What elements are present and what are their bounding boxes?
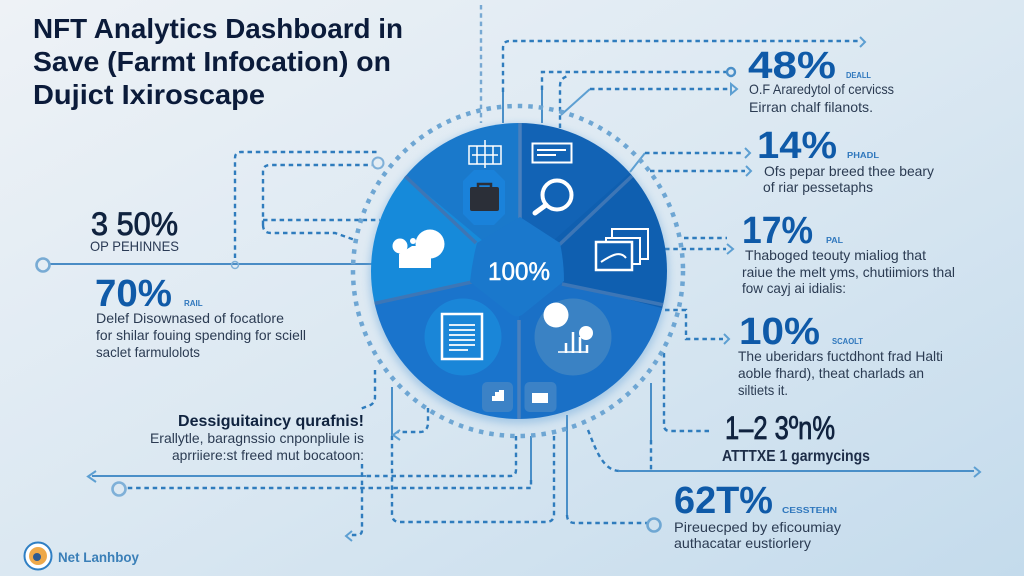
stat: 1-2 3% xyxy=(722,410,870,465)
icon: ornate emblem xyxy=(469,140,501,168)
stat: 17% xyxy=(742,210,955,296)
segment: top right xyxy=(520,123,632,240)
title: NFT Analytics Dashboard in xyxy=(33,13,403,44)
icon: small tile left xyxy=(482,382,513,412)
icon: briefcase xyxy=(463,170,505,225)
stat: 48%: 48% xyxy=(748,45,836,87)
text block: lower left: aprriiere:st freed mut bocatoon: xyxy=(172,447,364,463)
icon: picture frames xyxy=(596,229,648,270)
stat: 17%: 17% xyxy=(742,210,813,252)
stat: 10%: SCAOLT xyxy=(832,337,863,346)
donut chart xyxy=(366,120,672,428)
stat: 1-2 3%: ATTTXE 1 garmycings xyxy=(722,448,870,465)
stat: 10% xyxy=(738,311,943,398)
icon: card xyxy=(532,144,572,162)
stat: 14%: 14% xyxy=(757,125,837,167)
logo: Net Lanhboy xyxy=(58,549,139,565)
stat: 1-2 3%: 1–2 3ºn% xyxy=(725,410,835,446)
text block: lower left: Dessiguitaincy qurafnis! xyxy=(178,413,364,430)
left bottom node xyxy=(112,482,126,496)
logo xyxy=(24,542,139,570)
stat: 10%: siltiets it. xyxy=(738,382,788,398)
stat: 70% xyxy=(95,273,306,360)
title: Dujict Ixiroscape xyxy=(33,79,265,110)
segment: lower right xyxy=(519,282,662,419)
stat: 70%: RAIL xyxy=(184,299,203,308)
stat: 70%: Delef Disownased of focatlore xyxy=(96,310,284,326)
stat: 48%: Eirran chalf filanots. xyxy=(749,99,873,115)
text block: lower left xyxy=(150,413,364,463)
stat: 17%: PAL xyxy=(826,236,843,245)
segment: lower left xyxy=(374,284,519,419)
stat: 70%: 70% xyxy=(95,273,172,315)
stat: 14%: of riar pessetaphs xyxy=(763,179,873,195)
icon: small tile right xyxy=(524,382,556,412)
stat: 17%: fow cayj ai idialis: xyxy=(742,280,846,296)
icon: chart bubbles xyxy=(534,298,612,376)
bottom right node xyxy=(648,518,660,532)
stat: 48%: DEALL xyxy=(846,71,871,80)
stat: 17%: Thaboged teouty mialiog that xyxy=(745,247,926,263)
title xyxy=(33,13,403,110)
left line xyxy=(50,263,372,265)
center hub xyxy=(470,217,564,316)
text block: lower left: Erallytle, baragnssio cnponpliule is xyxy=(150,430,364,446)
segment: top left xyxy=(404,123,518,240)
dotted ring xyxy=(353,106,683,436)
stat: 3 50%: 3 50% xyxy=(91,206,178,242)
center value: 100% xyxy=(488,258,550,286)
stat: 48%: O.F Araredytol of cervicss xyxy=(749,81,894,97)
stat: 62T%: Pireuecped by eficoumiay xyxy=(674,519,841,535)
segment: left xyxy=(371,176,482,304)
icon: people cloud xyxy=(392,230,444,268)
icon: magnifier xyxy=(535,180,572,213)
stat: 14% xyxy=(757,125,934,195)
stat: 70%: saclet farmulolots xyxy=(96,344,200,360)
stat: 62T%: authacatar eustiorlery xyxy=(674,535,811,551)
stat: 48% xyxy=(748,45,894,115)
stat: 70%: for shilar fouing spending for sciell xyxy=(96,327,306,343)
stat: 3 50%: OP PEHINNES xyxy=(90,238,179,254)
stat: 14%: PHADL xyxy=(847,151,879,160)
stat: 62T% xyxy=(674,480,841,551)
stat: 62T%: 62T% xyxy=(674,480,773,522)
stat: 17%: raiue the melt yms, chutiimiors thal xyxy=(742,264,955,280)
icon: document xyxy=(424,298,502,376)
stat: 10%: aoble fhard), theat charlads an xyxy=(738,365,924,381)
segment: right xyxy=(556,173,667,310)
stat: 14%: Ofs pepar breed thee beary xyxy=(764,163,934,179)
stat: 10%: The uberidars fuctdhont frad Halti xyxy=(738,348,943,364)
title: Save (Farmt Infocation) on xyxy=(33,46,391,77)
stat: 62T%: CESSTEHN xyxy=(782,506,837,515)
stat: 10%: 10% xyxy=(739,311,820,353)
